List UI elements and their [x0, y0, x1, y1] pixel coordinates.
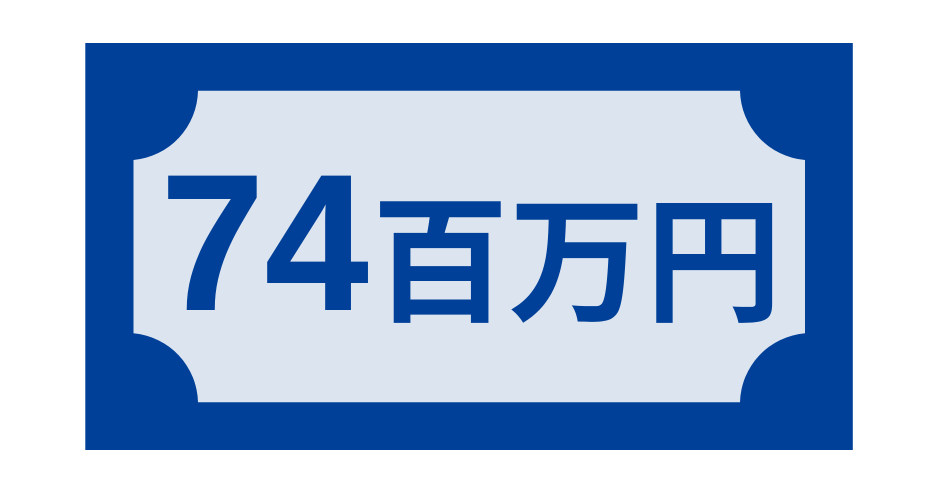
unit 百万円: 百万円 [372, 188, 782, 341]
banknote outer panel [85, 43, 853, 450]
banknote inner panel with scalloped corners [134, 91, 805, 402]
amount label [161, 136, 782, 351]
number 74: 74 [161, 136, 368, 351]
